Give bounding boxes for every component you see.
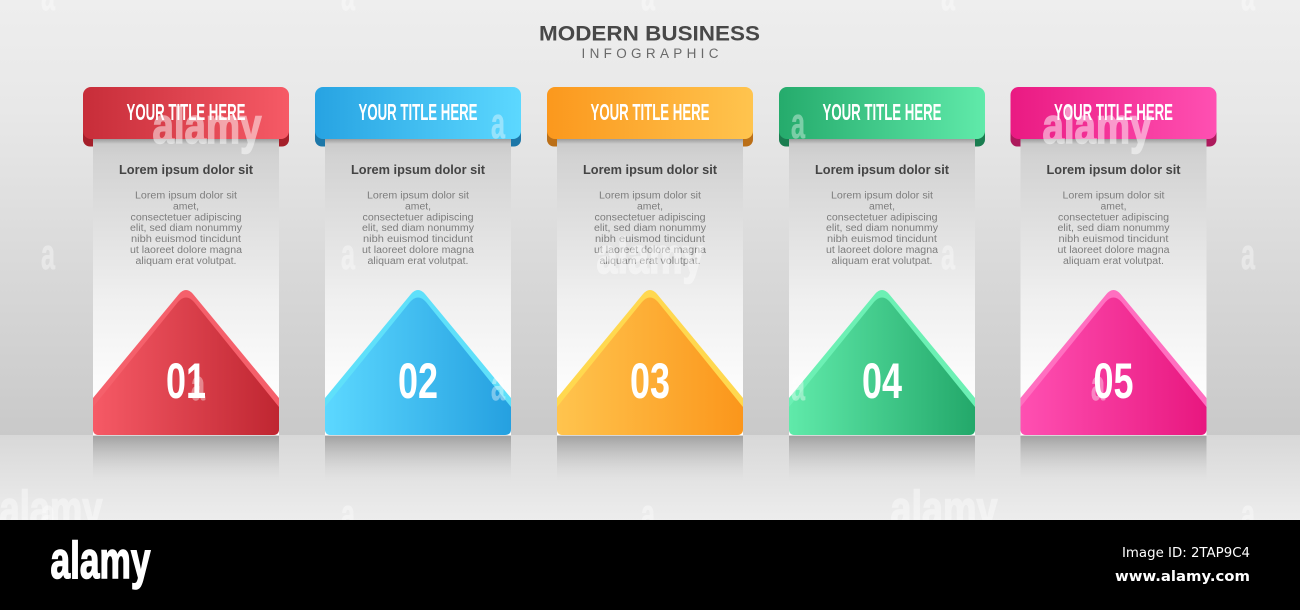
- body text 05: aliquam erat volutpat.: [1063, 256, 1164, 267]
- header bar 01: [83, 87, 289, 139]
- panel: step 05 pink: [1010, 87, 1216, 482]
- body text 03: Lorem ipsum dolor sit: [599, 190, 701, 202]
- triangle badge 01: 01: [166, 353, 206, 409]
- body text 02: Lorem ipsum dolor sit: [367, 190, 469, 202]
- body text 03: aliquam erat volutpat.: [599, 256, 701, 267]
- watermarks: alamy: [0, 481, 103, 537]
- body text 02: ut laoreet dolore magna: [362, 245, 474, 256]
- body text 04: amet,: [869, 202, 895, 212]
- header bar 02: [315, 87, 521, 139]
- watermarks: alamy: [890, 481, 998, 537]
- watermarks: alamy: [1042, 98, 1152, 154]
- body text 04: consectetuer adipiscing: [827, 212, 937, 223]
- triangle badge 02: [325, 290, 511, 435]
- panel: step 04 green: [779, 87, 985, 482]
- panel: step 03 orange: [547, 87, 753, 482]
- body text 05: [1058, 190, 1170, 267]
- body text 04: elit, sed diam nonummy: [826, 223, 938, 234]
- body text 05: ut laoreet dolore magna: [1057, 245, 1170, 256]
- subheading 02: Lorem ipsum dolor sit: [351, 162, 486, 177]
- header bar 02: YOUR TITLE HERE: [358, 99, 478, 125]
- body text 04: aliquam erat volutpat.: [831, 256, 933, 267]
- title: INFOGRAPHIC: [582, 46, 719, 61]
- image id and url: [1115, 545, 1250, 585]
- body text 04: [826, 190, 938, 267]
- watermarks: a: [941, 230, 955, 279]
- triangle badge 03: [557, 290, 743, 435]
- header bar 05: YOUR TITLE HERE: [1054, 99, 1173, 125]
- watermarks: a: [491, 99, 505, 148]
- body text 01: elit, sed diam nonummy: [130, 223, 242, 234]
- alamy logo: alamy: [50, 532, 151, 590]
- watermarks: alamy: [152, 98, 262, 154]
- title: [539, 22, 760, 61]
- body text 01: Lorem ipsum dolor sit: [135, 190, 237, 202]
- panel: step 01 red: [83, 87, 289, 482]
- watermarks: a: [341, 230, 355, 279]
- watermarks: a: [641, 490, 655, 539]
- image id and url: Image ID: 2TAP9C4: [1122, 545, 1250, 561]
- watermarks: a: [791, 361, 805, 410]
- image id and url: www.alamy.com: [1115, 569, 1250, 585]
- watermarks: alamy: [596, 228, 704, 284]
- header bar 03: [547, 87, 753, 139]
- body text 02: elit, sed diam nonummy: [362, 223, 474, 234]
- panel: step 02 blue: [315, 87, 521, 482]
- body text 05: consectetuer adipiscing: [1058, 212, 1169, 223]
- body text 03: nibh euismod tincidunt: [595, 234, 705, 245]
- body text 04: ut laoreet dolore magna: [826, 245, 938, 256]
- watermarks: a: [41, 490, 55, 539]
- body text 03: [594, 190, 706, 267]
- watermarks: a: [41, 230, 55, 279]
- footer bar: [0, 520, 1300, 610]
- watermarks: a: [191, 361, 205, 410]
- header bar 04: YOUR TITLE HERE: [822, 99, 942, 125]
- header bar 01: YOUR TITLE HERE: [126, 99, 246, 125]
- body text 04: nibh euismod tincidunt: [827, 234, 937, 245]
- title: MODERN BUSINESS: [539, 22, 760, 46]
- watermarks: a: [491, 361, 505, 410]
- watermarks: a: [1241, 230, 1255, 279]
- body text 01: ut laoreet dolore magna: [130, 245, 242, 256]
- body text 03: ut laoreet dolore magna: [594, 245, 706, 256]
- body text 05: amet,: [1100, 202, 1126, 212]
- header bar 04: [779, 87, 985, 139]
- subheading 05: Lorem ipsum dolor sit: [1046, 162, 1181, 177]
- body text 01: nibh euismod tincidunt: [131, 234, 241, 245]
- triangle badge 05: 05: [1094, 353, 1134, 409]
- body text 05: Lorem ipsum dolor sit: [1062, 190, 1165, 202]
- triangle badge 05: [1020, 290, 1206, 435]
- watermarks: a: [1091, 361, 1105, 410]
- body text 01: consectetuer adipiscing: [131, 212, 241, 223]
- body text 04: Lorem ipsum dolor sit: [831, 190, 933, 202]
- body text 01: aliquam erat volutpat.: [135, 256, 237, 267]
- body text 05: elit, sed diam nonummy: [1057, 223, 1170, 234]
- subheading 04: Lorem ipsum dolor sit: [815, 162, 950, 177]
- header bar 05: [1010, 87, 1216, 139]
- watermarks: a: [791, 99, 805, 148]
- body text 01: [130, 190, 242, 267]
- body text 02: [362, 190, 474, 267]
- body text 02: consectetuer adipiscing: [363, 212, 473, 223]
- body text 01: amet,: [173, 202, 199, 212]
- body text 02: amet,: [405, 202, 431, 212]
- watermarks: a: [341, 490, 355, 539]
- triangle badge 04: 04: [862, 353, 902, 409]
- body text 02: nibh euismod tincidunt: [363, 234, 473, 245]
- body text 02: aliquam erat volutpat.: [367, 256, 469, 267]
- body text 03: amet,: [637, 202, 663, 212]
- triangle badge 03: 03: [630, 353, 670, 409]
- subheading 03: Lorem ipsum dolor sit: [583, 162, 718, 177]
- body text 05: nibh euismod tincidunt: [1058, 234, 1169, 245]
- watermarks: a: [1241, 490, 1255, 539]
- subheading 01: Lorem ipsum dolor sit: [119, 162, 254, 177]
- body text 03: consectetuer adipiscing: [595, 212, 705, 223]
- body text 03: elit, sed diam nonummy: [594, 223, 706, 234]
- triangle badge 02: 02: [398, 353, 438, 409]
- triangle badge 01: [93, 290, 279, 435]
- header bar 03: YOUR TITLE HERE: [590, 99, 710, 125]
- triangle badge 04: [789, 290, 975, 435]
